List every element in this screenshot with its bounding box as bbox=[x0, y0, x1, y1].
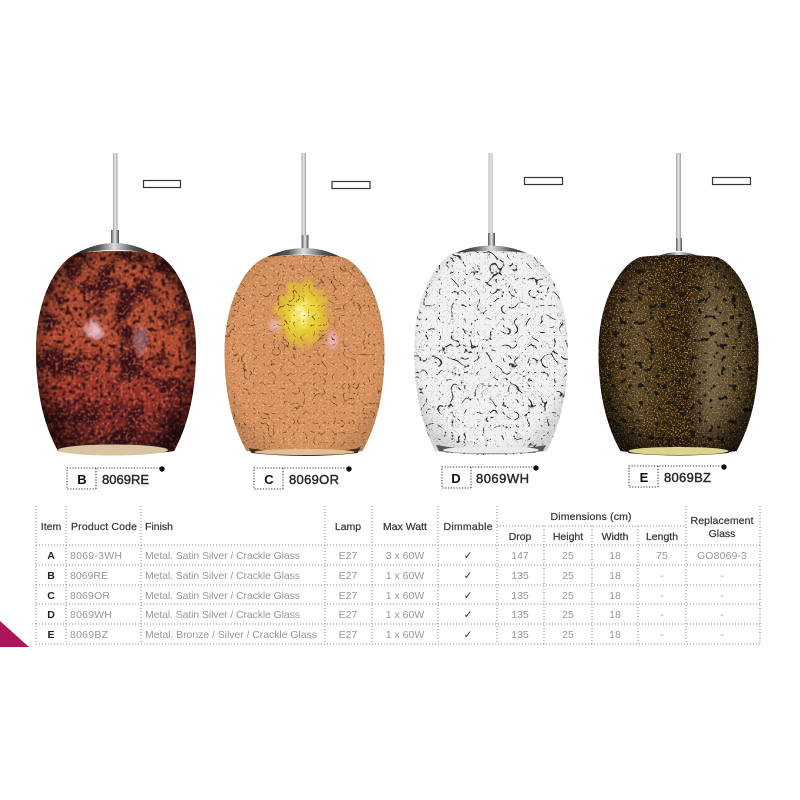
row C: ✓ bbox=[464, 590, 472, 602]
lamp C: orange crackle pendant bbox=[224, 153, 384, 458]
table header: Glass bbox=[709, 528, 735, 540]
product label D: D bbox=[451, 471, 461, 486]
row B: B bbox=[47, 570, 55, 582]
row E: - bbox=[720, 629, 724, 641]
product label B: B bbox=[77, 472, 87, 487]
row E bbox=[47, 629, 724, 641]
table header: Max Watt bbox=[383, 521, 427, 533]
table header: Lamp bbox=[335, 521, 361, 533]
lamp B: red crackle pendant bbox=[36, 153, 196, 458]
lamp D: white crackle pendant bbox=[414, 153, 568, 458]
row B: 18 bbox=[609, 570, 621, 582]
row B: 135 bbox=[511, 570, 529, 582]
product label C: C bbox=[264, 472, 274, 487]
row D: 25 bbox=[562, 609, 574, 621]
row A: Metal. Satin Silver / Crackle Glass bbox=[145, 550, 300, 562]
product label E: E bbox=[640, 470, 649, 485]
table header bbox=[41, 511, 754, 543]
row C: E27 bbox=[339, 590, 357, 602]
row D: D bbox=[47, 609, 55, 621]
empty label box C bbox=[332, 182, 370, 188]
row B: ✓ bbox=[464, 570, 472, 582]
product label E bbox=[629, 464, 727, 487]
row D: 8069WH bbox=[70, 609, 112, 621]
row A: ✓ bbox=[464, 550, 472, 562]
row A: A bbox=[47, 550, 55, 562]
row A: 147 bbox=[511, 550, 529, 562]
row E: 135 bbox=[511, 629, 529, 641]
row D: ✓ bbox=[464, 609, 472, 621]
row E: - bbox=[660, 629, 664, 641]
table header: Height bbox=[553, 531, 583, 543]
product label C bbox=[254, 466, 352, 489]
row C: C bbox=[47, 590, 55, 602]
row A: E27 bbox=[339, 550, 357, 562]
table header: Length bbox=[646, 531, 678, 543]
row B: - bbox=[720, 570, 724, 582]
row C bbox=[47, 590, 724, 602]
table header: Dimmable bbox=[444, 521, 493, 533]
empty label box E bbox=[712, 178, 750, 184]
product label B bbox=[67, 466, 165, 489]
row A: 75 bbox=[656, 550, 668, 562]
specification table bbox=[36, 506, 760, 644]
empty label box D bbox=[524, 178, 562, 184]
table header: Product Code bbox=[71, 521, 137, 533]
row D: 1 x 60W bbox=[386, 609, 424, 621]
corner triangle bbox=[0, 621, 29, 647]
row D: Metal. Satin Silver / Crackle Glass bbox=[145, 609, 300, 621]
row A: 8069-3WH bbox=[70, 550, 122, 562]
row C: - bbox=[660, 590, 664, 602]
row D: E27 bbox=[339, 609, 357, 621]
row B: Metal. Satin Silver / Crackle Glass bbox=[145, 570, 300, 582]
row D bbox=[47, 609, 724, 621]
row B: E27 bbox=[339, 570, 357, 582]
lamp E: bronze crackle pendant bbox=[598, 153, 758, 458]
row E: ✓ bbox=[464, 629, 472, 641]
product label B: 8069RE bbox=[102, 472, 149, 487]
row A: GO8069-3 bbox=[697, 550, 747, 562]
row E: E bbox=[47, 629, 55, 641]
row E: Metal. Bronze / Silver / Crackle Glass bbox=[145, 629, 317, 641]
row E: 18 bbox=[609, 629, 621, 641]
row A: 25 bbox=[562, 550, 574, 562]
row D: - bbox=[660, 609, 664, 621]
row D: - bbox=[720, 609, 724, 621]
row C: 18 bbox=[609, 590, 621, 602]
table header: Drop bbox=[509, 531, 532, 543]
row E: 8069BZ bbox=[70, 629, 109, 641]
row E: 1 x 60W bbox=[386, 629, 424, 641]
row C: 1 x 60W bbox=[386, 590, 424, 602]
product label E: 8069BZ bbox=[664, 470, 711, 485]
row A: 3 x 60W bbox=[386, 550, 424, 562]
row D: 135 bbox=[511, 609, 529, 621]
row B: 1 x 60W bbox=[386, 570, 424, 582]
row A bbox=[47, 550, 747, 562]
table header: Finish bbox=[145, 521, 173, 533]
row C: 8069OR bbox=[70, 590, 110, 602]
row C: 25 bbox=[562, 590, 574, 602]
table header: Width bbox=[602, 531, 629, 543]
product label D: 8069WH bbox=[476, 471, 529, 486]
product label D bbox=[442, 465, 539, 488]
row A: 18 bbox=[609, 550, 621, 562]
empty label box B bbox=[144, 180, 180, 188]
row C: 135 bbox=[511, 590, 529, 602]
row D: 18 bbox=[609, 609, 621, 621]
row B: - bbox=[660, 570, 664, 582]
row E: 25 bbox=[562, 629, 574, 641]
row C: - bbox=[720, 590, 724, 602]
table header: Replacement bbox=[690, 515, 754, 527]
row B: 25 bbox=[562, 570, 574, 582]
row B: 8069RE bbox=[70, 570, 108, 582]
row E: E27 bbox=[339, 629, 357, 641]
product label C: 8069OR bbox=[289, 472, 339, 487]
row C: Metal. Satin Silver / Crackle Glass bbox=[145, 590, 300, 602]
table header: Item bbox=[41, 521, 61, 533]
row B bbox=[47, 570, 724, 582]
table header: Dimensions (cm) bbox=[550, 511, 632, 523]
